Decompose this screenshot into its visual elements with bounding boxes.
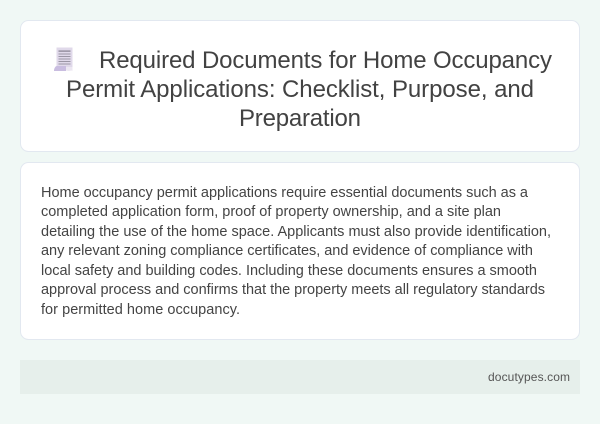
title: Required Documents for Home Occupancy bbox=[99, 47, 552, 74]
footer source text: docutypes.com bbox=[488, 370, 570, 384]
title: Permit Applications: Checklist, Purpose, and bbox=[66, 76, 534, 103]
text block: description: detailing the use of the home space. Applicants must also provide identification, bbox=[41, 224, 551, 240]
title bbox=[66, 47, 552, 132]
footer bar bbox=[20, 360, 580, 394]
title: Preparation bbox=[239, 105, 361, 132]
text block: description: completed application form, proof of property ownership, and a site plan bbox=[41, 204, 501, 220]
text block: description: any relevant zoning compliance certificates, and evidence of compliance with bbox=[41, 243, 533, 259]
panel: description card bbox=[20, 162, 580, 340]
panel: title card bbox=[20, 20, 580, 152]
text block: description: local safety and building codes. Including these documents ensures a smooth bbox=[41, 263, 537, 279]
text block: description: Home occupancy permit applications require essential documents such as a bbox=[41, 185, 529, 201]
text block: description: approval process and confirms that the property meets all regulatory standards bbox=[41, 282, 545, 298]
text block: description bbox=[41, 185, 551, 318]
icon: document receipt bbox=[54, 48, 72, 71]
text block: description: for permitted home occupancy. bbox=[41, 302, 240, 318]
